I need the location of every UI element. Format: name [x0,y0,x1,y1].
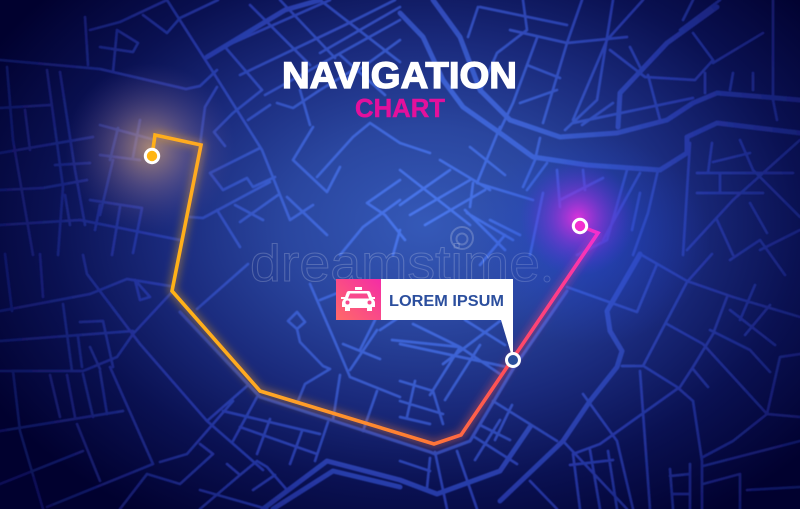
callout body with pointer [381,279,513,360]
route glow [155,135,598,444]
watermark spiral logo [451,227,473,249]
icon: taxi [341,287,375,311]
destination marker [573,219,587,233]
glow: destination [520,160,636,276]
title: NAVIGATION [282,55,517,96]
route-parallel road [180,291,567,454]
glow: start point [65,63,235,233]
icon tile [336,279,381,320]
watermark word: dreamstime [250,235,540,293]
registered mark [544,276,550,282]
callout label: LOREM IPSUM [389,293,504,310]
watermark [250,227,550,293]
callout [336,279,513,360]
current position marker [506,354,520,366]
start marker [145,149,159,163]
major roads [207,0,800,509]
glow: blue destination halo [470,135,710,345]
route line [152,135,598,444]
subtitle: CHART [355,93,445,123]
minor streets [0,0,400,247]
